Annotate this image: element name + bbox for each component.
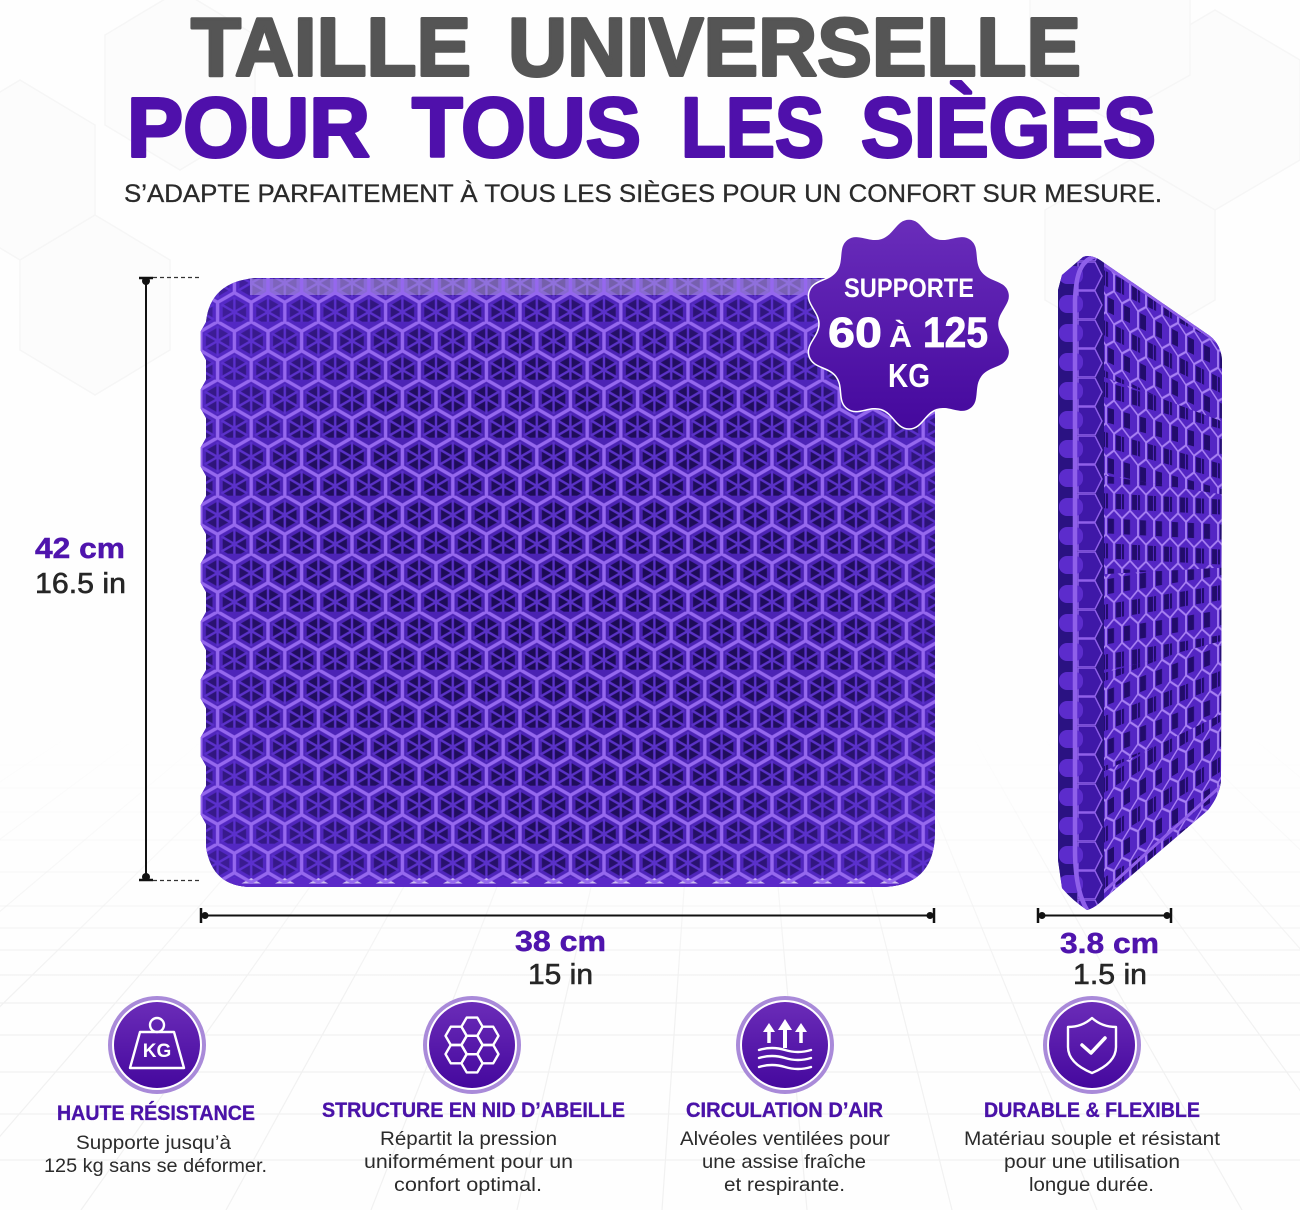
title line 2: LES xyxy=(681,80,824,174)
description: Alvéoles ventilées pour xyxy=(680,1128,891,1150)
height label: 42 cm xyxy=(35,533,125,565)
height label xyxy=(35,533,126,600)
feature: haute résistance xyxy=(44,998,267,1177)
width label xyxy=(515,926,606,991)
title line 1 xyxy=(191,0,1081,94)
badge: supporte 60 à 125 kg xyxy=(808,219,1010,429)
height label: 16.5 in xyxy=(35,568,126,600)
floor perspective grid xyxy=(0,730,1300,1210)
title line 2: TOUS xyxy=(412,80,641,174)
badge: supporte 60 à 125 kg: KG xyxy=(888,357,930,394)
thickness label: 1.5 in xyxy=(1073,959,1147,991)
description xyxy=(964,1128,1221,1196)
heading: CIRCULATION D’AIR xyxy=(686,1098,883,1122)
thickness label xyxy=(1060,928,1159,991)
heading: DURABLE & FLEXIBLE xyxy=(984,1098,1200,1122)
title line 1: UNIVERSELLE xyxy=(508,0,1081,94)
description: une assise fraîche xyxy=(702,1151,866,1173)
width label: 38 cm xyxy=(515,926,606,958)
icon: shield with check xyxy=(1045,998,1139,1092)
title line 2 xyxy=(127,80,1156,174)
icon: kg weight xyxy=(110,998,204,1092)
width label: 15 in xyxy=(528,959,593,991)
description xyxy=(680,1128,891,1196)
description: Matériau souple et résistant xyxy=(964,1128,1221,1150)
heading: HAUTE RÉSISTANCE xyxy=(57,1100,255,1125)
badge: supporte 60 à 125 kg: À xyxy=(889,319,912,354)
width dimension line xyxy=(201,908,934,923)
feature: structure en nid d'abeille xyxy=(322,998,625,1196)
heading: STRUCTURE EN NID D’ABEILLE xyxy=(322,1098,625,1122)
badge: supporte 60 à 125 kg: 125 xyxy=(923,309,988,357)
description: 125 kg sans se déformer. xyxy=(44,1155,267,1177)
description: et respirante. xyxy=(724,1174,845,1196)
cushion front view xyxy=(195,275,940,890)
cushion side view xyxy=(1058,256,1222,910)
description: Répartit la pression xyxy=(380,1128,557,1150)
description: pour une utilisation xyxy=(1004,1151,1180,1173)
icon: air flow arrows and waves xyxy=(738,998,832,1092)
title xyxy=(127,0,1156,174)
thickness label: 3.8 cm xyxy=(1060,928,1159,960)
badge: supporte 60 à 125 kg: SUPPORTE xyxy=(844,273,974,303)
icon: honeycomb xyxy=(425,998,519,1092)
title line 1: TAILLE xyxy=(191,0,471,94)
badge: supporte 60 à 125 kg: 60 xyxy=(828,309,882,357)
subtitle: S’ADAPTE PARFAITEMENT À TOUS LES SIÈGES POUR UN CONFORT SUR MESURE. xyxy=(124,179,1162,208)
description xyxy=(364,1128,573,1196)
title line 2: SIÈGES xyxy=(861,80,1156,174)
thickness dimension line xyxy=(1038,908,1171,923)
vertical dimension line xyxy=(139,277,202,881)
feature: durable & flexible xyxy=(964,998,1221,1196)
description: uniformément pour un xyxy=(364,1151,573,1173)
description: Supporte jusqu’à xyxy=(76,1132,231,1154)
description xyxy=(44,1132,267,1177)
title line 2: POUR xyxy=(127,80,370,174)
description: longue durée. xyxy=(1029,1174,1154,1196)
description: confort optimal. xyxy=(394,1174,542,1196)
icon: kg weight: KG xyxy=(143,1041,171,1062)
feature: circulation d'air xyxy=(680,998,891,1196)
